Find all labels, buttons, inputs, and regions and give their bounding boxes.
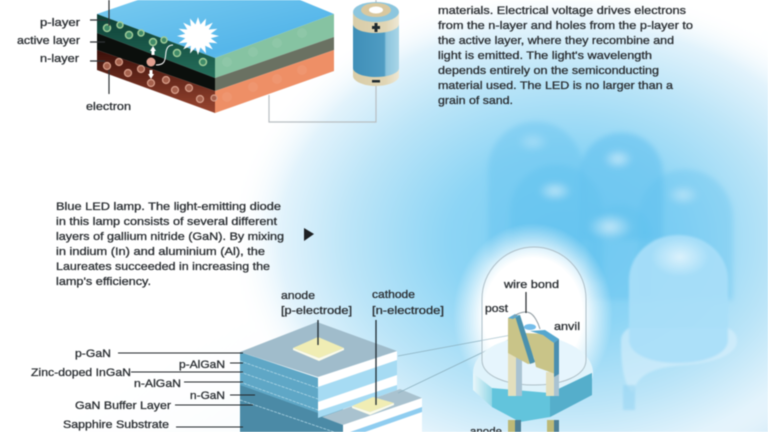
active layer diagram (17, 0, 399, 122)
holes in p-layer (104, 22, 206, 66)
text: LED description: grain of sand. (438, 95, 513, 107)
anode pad (293, 337, 344, 361)
white glow behind main lamp (453, 223, 613, 407)
chip labels: GaN Buffer Layer (75, 400, 171, 412)
background lamps (488, 121, 733, 300)
layer labels: electron (86, 101, 131, 113)
text: Blue LED lamp description: in this lamp consists of several different (56, 216, 277, 228)
text: LED description: depends entirely on the semiconducting (438, 65, 659, 77)
arrow (304, 228, 314, 241)
main LED lamp (470, 247, 593, 432)
icon: light burst (177, 17, 219, 55)
chip labels (31, 289, 444, 431)
layer labels: p-layer (40, 17, 80, 29)
text: Blue LED lamp description: in indium (In) and aluminium (Al), the (56, 246, 265, 258)
layer labels: n-layer (40, 53, 79, 65)
chip labels: anode (281, 290, 315, 302)
lamp labels: wire bond (503, 279, 559, 291)
text: Blue LED lamp description: Blue LED lamp. The light-emitting diode (56, 201, 281, 213)
anvil (524, 330, 559, 377)
chip labels: Sapphire Substrate (63, 419, 169, 431)
lamp flange (473, 337, 593, 422)
text: LED description: material used. The LED is no larger than a (438, 80, 674, 92)
chip labels: [p-electrode] (281, 305, 352, 317)
electrons in n-layer (104, 58, 217, 102)
cathode pad (352, 397, 394, 415)
lamp dome (482, 247, 586, 385)
lower step (322, 389, 422, 432)
text: LED description: from the n-layer and holes from the p-layer to (438, 20, 693, 32)
text: Blue LED lamp description: lamp's efficiency. (56, 276, 151, 288)
circuit wire (269, 0, 376, 122)
chip labels: p-AlGaN (179, 359, 225, 371)
icon: battery (353, 2, 399, 86)
chip labels: cathode (372, 289, 415, 301)
chip: top face (240, 322, 397, 377)
post (508, 314, 535, 364)
LED chip stack (31, 289, 523, 432)
LED cube: right layers (215, 14, 334, 113)
wire bond (513, 312, 540, 329)
text: LED description (438, 5, 693, 107)
LED cube: front-left layers (97, 14, 215, 113)
electrode leader lines (318, 320, 376, 405)
text: LED description: the active layer, where they recombine and (438, 35, 674, 47)
lamp legs (508, 350, 559, 432)
text: Blue LED lamp description: layers of gallium nitride (GaN). By mixing (56, 231, 284, 243)
text: LED description: light is emitted. The light's wavelength (438, 50, 652, 62)
connector lines to lamp (398, 333, 523, 393)
lamp labels: anvil (554, 321, 580, 333)
chip: left face (240, 352, 343, 432)
chip on anvil (524, 324, 536, 330)
chip: upper right face (318, 351, 397, 418)
layer labels (17, 0, 131, 113)
layer labels: active layer (17, 35, 80, 47)
text: LED description: materials. Electrical voltage drives electrons (438, 5, 687, 17)
lamp labels (470, 279, 580, 432)
lamp labels: post (485, 303, 508, 315)
recombination (146, 45, 173, 79)
LED cube: top face (97, 0, 334, 58)
chip labels: p-GaN (75, 348, 111, 360)
chip labels: n-AlGaN (134, 378, 181, 390)
foreground pale lamp (621, 235, 737, 410)
chip labels: [n-electrode] (372, 305, 444, 317)
chip labels: Zinc-doped InGaN (31, 367, 131, 379)
chip labels: n-GaN (190, 390, 225, 402)
text: Blue LED lamp description (56, 201, 284, 288)
text: Blue LED lamp description: Laureates succeeded in increasing the (56, 261, 270, 273)
